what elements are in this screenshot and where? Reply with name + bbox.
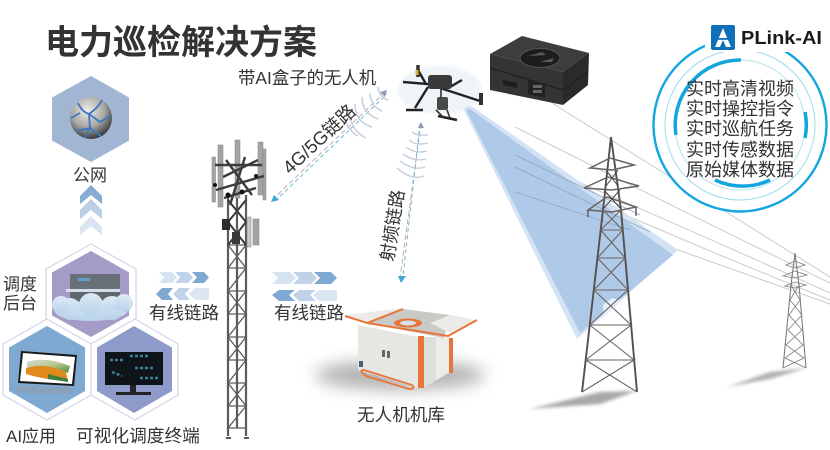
4G/5G link arrow xyxy=(271,87,388,202)
public network label: 公网 xyxy=(73,166,107,185)
small pylon xyxy=(727,253,807,387)
info circle xyxy=(654,38,826,212)
dispatch backend label: 调度 xyxy=(3,275,37,294)
icon: server rack xyxy=(66,274,120,310)
wired link label right: 有线链路 xyxy=(274,303,344,323)
logo xyxy=(705,20,830,52)
visual terminal label: 可视化调度终端 xyxy=(76,426,200,446)
cell tower xyxy=(212,140,266,438)
icon: laptop xyxy=(17,351,77,394)
data list: 实时巡航任务 xyxy=(686,119,794,139)
4G/5G link label: 4G/5G链路 xyxy=(278,100,360,178)
drone model label: 带AI盒子的无人机 xyxy=(238,68,377,88)
dispatch backend label xyxy=(3,275,37,313)
data list: 实时高清视频 xyxy=(686,79,794,99)
icon: monitor xyxy=(105,352,163,395)
antennas xyxy=(212,140,266,247)
icon: cloud xyxy=(52,293,133,321)
lattice mast xyxy=(226,195,249,438)
outer ring xyxy=(654,38,826,212)
AI box xyxy=(490,36,589,105)
data list: 实时操控指令 xyxy=(686,99,794,119)
wired link arrows right xyxy=(272,272,337,301)
public network hexagon xyxy=(52,76,129,162)
RF link label: 射频链路 xyxy=(377,188,408,263)
visual terminal hexagon xyxy=(91,319,178,420)
power lines xyxy=(515,103,830,304)
data list: 实时传感数据 xyxy=(686,140,794,160)
upward chevrons xyxy=(80,185,102,235)
large pylon xyxy=(530,137,639,409)
icon: globe xyxy=(70,97,112,139)
hangar label: 无人机机库 xyxy=(357,405,445,425)
drone xyxy=(398,65,483,120)
dispatch backend label: 后台 xyxy=(3,294,37,313)
logo: PLink-AI xyxy=(741,28,822,48)
AI application hexagon xyxy=(3,319,91,420)
RF link arrow xyxy=(397,122,428,283)
AI application label: AI应用 xyxy=(6,427,56,446)
camera view cone xyxy=(457,96,678,339)
title: 电力巡检解决方案 xyxy=(45,24,317,62)
data list: 原始媒体数据 xyxy=(686,160,794,180)
wired link arrows left xyxy=(156,272,209,300)
dispatch backend hexagon xyxy=(46,244,136,344)
brackets xyxy=(215,157,264,205)
wired link label left: 有线链路 xyxy=(149,303,219,323)
data list xyxy=(686,79,794,180)
drone hangar xyxy=(315,308,485,390)
